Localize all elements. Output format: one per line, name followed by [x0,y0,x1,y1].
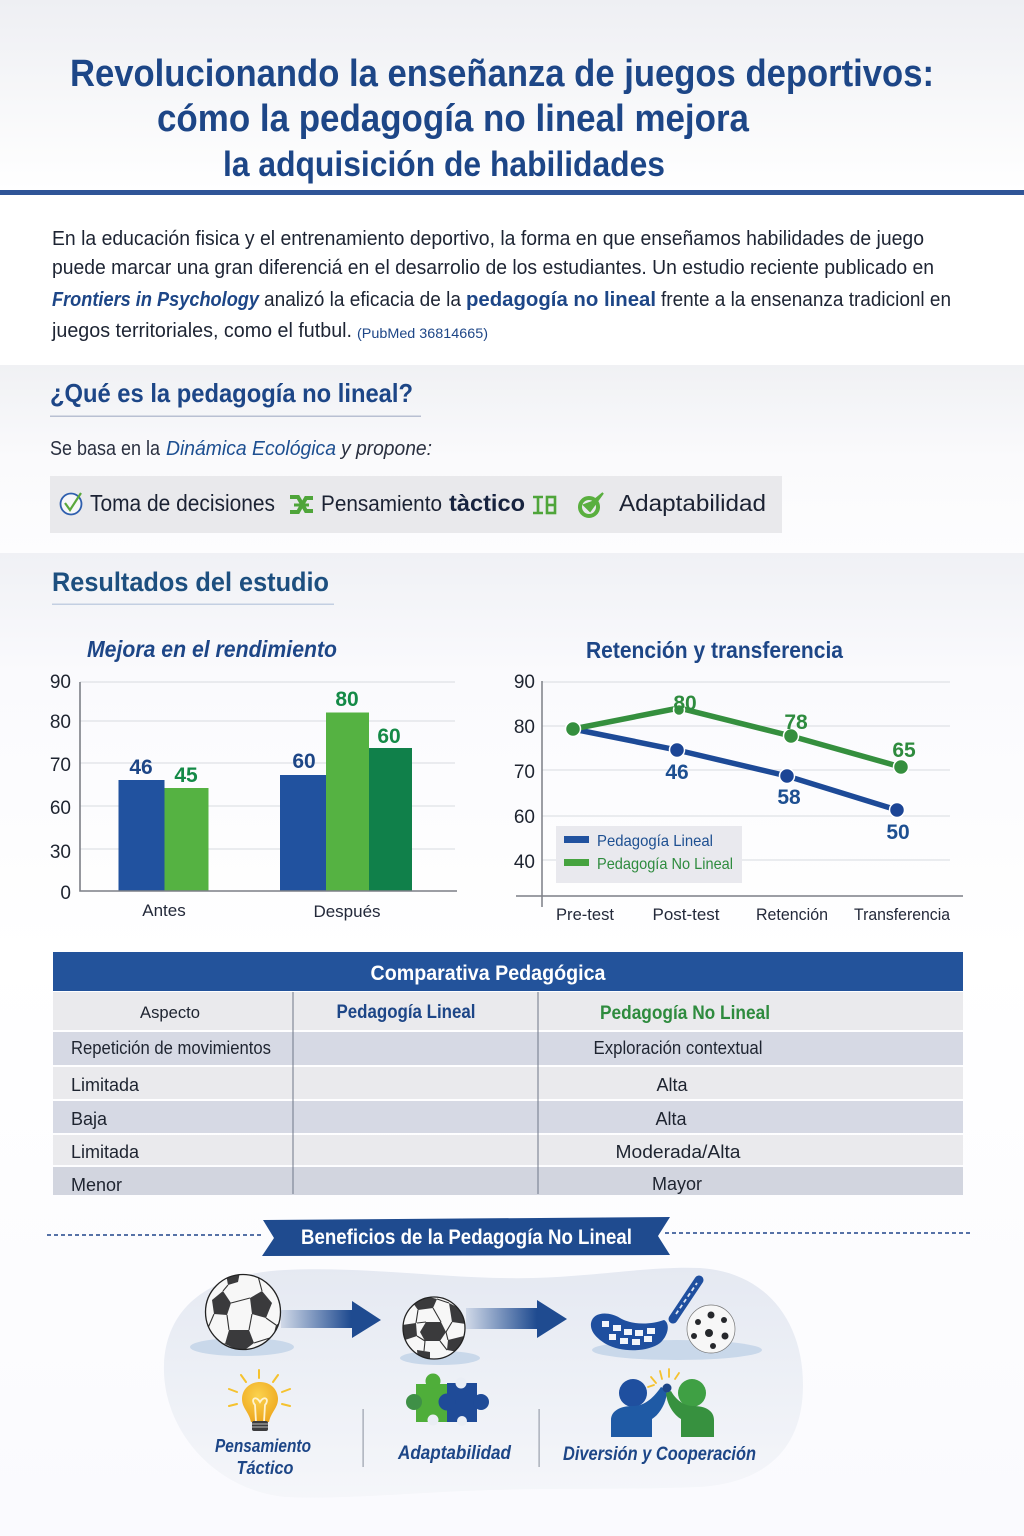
benefits banner: Beneficios de la Pedagogía No Lineal [301,1226,632,1249]
icon: green blocks [533,497,555,513]
icon: soccer ball small [400,1296,480,1365]
intro paragraph: (PubMed 36814665) [357,325,488,341]
label: adaptabilidad: Adaptabilidad [397,1443,511,1464]
column headings [140,1002,770,1024]
table: comparativa pedagógica [53,952,963,1195]
text: pensamiento táctico: Pensamiento [321,491,442,516]
panel: benefits [164,1268,803,1474]
line value labels: 65 [892,739,916,762]
intro paragraph: analizó la eficacia de la [264,289,462,311]
subheading text: y propone: [339,438,432,460]
x axis labels: Después [313,902,381,921]
column headings: Pedagogía Lineal [336,1002,476,1023]
intro paragraph: En la educación fisica y el entrenamiento deportivo, la forma en que enseñamos habilidades de juego [52,228,924,250]
title: Revolucionando la enseñanza de juegos deportivos: [70,53,934,95]
title: la adquisición de habilidades [223,145,665,184]
line value labels [665,692,916,844]
table rows: no lineal column: Exploración contextual [594,1038,762,1058]
intro paragraph: Frontiers in Psychology [52,289,260,311]
y axis labels: 40 [514,852,535,873]
icon: floorball stick and ball [591,1280,762,1360]
table header: Comparativa Pedagógica [370,962,606,985]
y axis labels: 60 [514,807,535,828]
label: pensamiento táctico: Táctico [236,1458,294,1478]
table header [53,952,963,991]
x axis labels: Post-test [652,905,720,924]
line value labels: 80 [673,692,697,715]
heading: qué es: ¿Qué es la pedagogía no lineal? [50,378,413,408]
table rows: no lineal column: Alta [656,1075,688,1095]
bar value labels: 45 [174,764,198,787]
table rows: aspect column: Limitada [71,1142,140,1162]
y axis labels: 90 [50,672,71,693]
benefits banner [47,1217,970,1256]
text: toma de decisiones: Toma de decisiones [90,490,275,516]
icon: crossing arrows [290,497,313,512]
column headings: Aspecto [140,1003,200,1022]
bars [118,712,412,891]
subheading text: Se basa en la [50,438,161,460]
chart title: Mejora en el rendimiento [87,636,337,662]
bar chart: mejora en el rendimiento [50,636,457,921]
y axis labels: 70 [514,762,535,783]
intro paragraph: puede marcar una gran diferenciá en el desarrolio de los estudiantes. Un estudio reciente publicado en [52,257,934,279]
y axis labels: 60 [50,798,71,819]
x axis labels: Pre-test [556,905,614,924]
x axis labels: Transferencia [854,905,950,924]
table rows: no lineal column [594,1038,762,1194]
icon: people high five [611,1369,714,1437]
y axis labels: 80 [50,712,71,733]
series: pedagogía lineal [573,729,904,818]
icon: light bulb [229,1370,290,1431]
table rows: aspect column: Menor [71,1175,122,1195]
line value labels: 58 [777,786,801,809]
line value labels: 50 [886,821,910,844]
y axis labels [50,672,71,904]
label: pensamiento táctico [215,1436,311,1478]
table rows: no lineal column: Mayor [652,1174,702,1194]
table rows: aspect column: Limitada [71,1075,140,1095]
x axis labels: Antes [142,901,186,920]
arrow 2 [466,1300,567,1338]
x axis labels [556,905,950,924]
y axis labels: 70 [50,755,71,776]
bar value labels: 80 [335,688,359,711]
table rows: aspect column: Repetición de movimientos [71,1038,271,1058]
x axis labels [142,901,381,921]
table rows: aspect column: Baja [71,1109,108,1129]
table rows: aspect column [71,1038,271,1195]
legend: Pedagogía No Lineal [597,856,733,873]
subheading text: Dinámica Ecológica [166,438,336,460]
bar value labels: 60 [377,725,401,748]
intro paragraph [51,228,951,342]
column headings: Pedagogía No Lineal [600,1003,770,1024]
icon: check circle [60,493,82,514]
subheading text [50,438,432,460]
y axis labels: 30 [50,842,71,863]
title [70,53,934,184]
bar value labels: 46 [129,756,153,779]
intro paragraph: juegos territoriales, como el futbul. [51,320,352,342]
legend [556,826,742,883]
table rows: no lineal column: Moderada/Alta [616,1142,742,1162]
text: pensamiento táctico: tàctico [449,490,525,516]
y axis labels: 90 [514,672,535,693]
intro paragraph: frente a la ensenanza tradicionl en [661,289,951,311]
title: cómo la pedagogía no lineal mejora [157,98,750,140]
y axis labels: 0 [60,883,71,904]
line value labels: 46 [665,761,689,784]
bar value labels [129,688,401,787]
line value labels: 78 [784,711,808,734]
icon: soccer ball large [190,1272,294,1356]
y axis labels: 80 [514,717,535,738]
chart title: Retención y transferencia [586,637,843,663]
y axis labels [514,672,535,873]
text: adaptabilidad: Adaptabilidad [619,490,766,516]
arrow 1 [281,1301,381,1338]
line chart: retención y transferencia [514,637,963,924]
table rows: no lineal column: Alta [655,1109,687,1129]
label: pensamiento táctico: Pensamiento [215,1436,311,1456]
legend: Pedagogía Lineal [597,833,713,850]
icon: green check badge [580,493,603,516]
series: pedagogía no lineal [566,704,908,774]
heading: resultados: Resultados del estudio [52,567,329,597]
label: diversión y cooperación: Diversión y Cooperación [563,1444,756,1465]
x axis labels: Retención [756,905,828,924]
text: pensamiento táctico [321,490,525,516]
panel: features strip [50,476,782,533]
intro paragraph: pedagogía no lineal [466,289,656,311]
icon: puzzle [406,1374,489,1426]
bar value labels: 60 [292,750,316,773]
